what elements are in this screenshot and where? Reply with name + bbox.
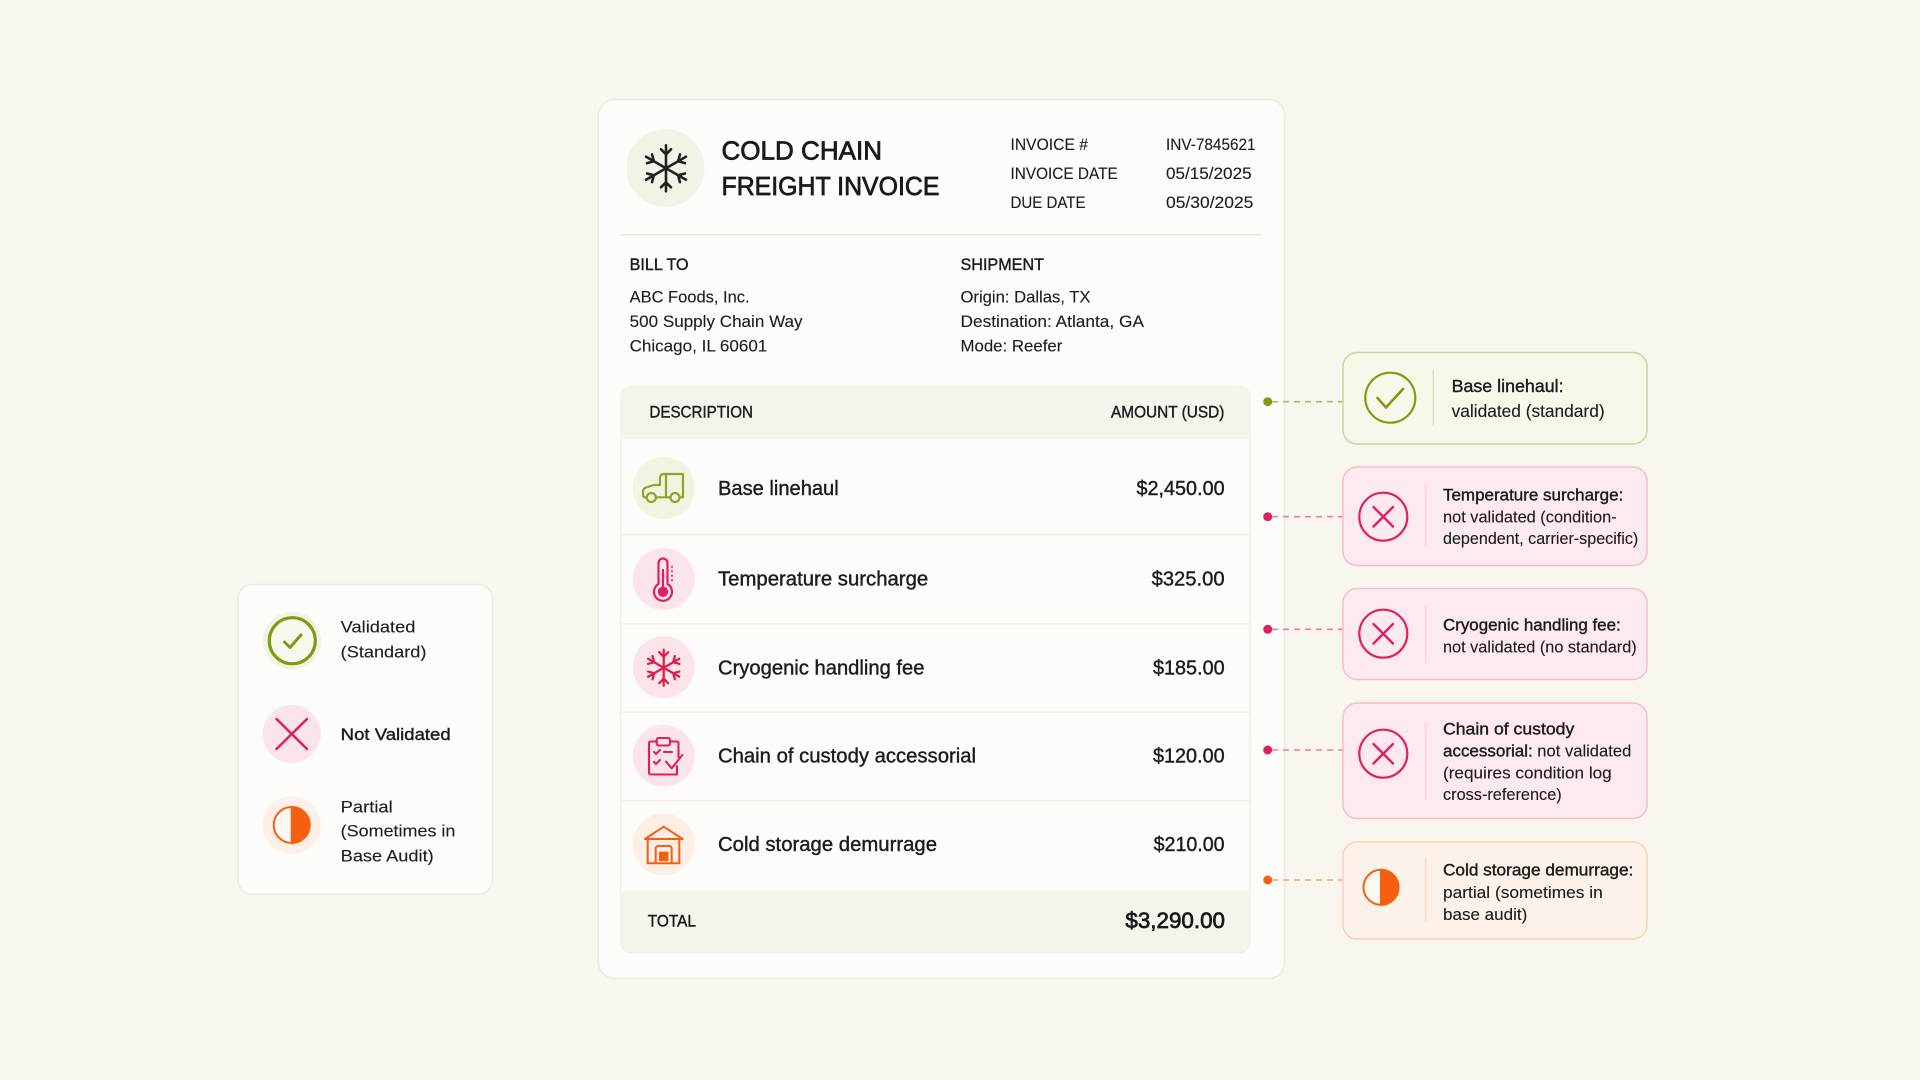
panel: invoice card <box>598 100 1284 978</box>
row: chain of custody accessorial: Chain of custody accessorial <box>718 746 976 768</box>
bill to block: 500 Supply Chain Way <box>630 312 803 331</box>
icon: clipboard checklist <box>633 725 695 787</box>
total row: $3,290.00 <box>1125 908 1225 933</box>
callout: base linehaul <box>1343 352 1647 444</box>
callout: temperature surcharge: dependent, carrier-specific) <box>1443 530 1638 548</box>
row: temperature surcharge: Temperature surcharge <box>718 569 928 591</box>
legend: partial <box>263 796 455 866</box>
shipment block: Destination: Atlanta, GA <box>960 312 1145 331</box>
callout: cryogenic handling fee <box>1343 588 1647 680</box>
invoice metadata: 05/30/2025 <box>1166 194 1253 212</box>
icon: warehouse <box>633 814 695 876</box>
callout: temperature surcharge: not validated (condition- <box>1443 508 1617 526</box>
row: chain of custody accessorial <box>633 725 1225 787</box>
row: temperature surcharge <box>633 548 1225 610</box>
legend: validated: Validated <box>341 618 415 636</box>
callout: cold storage demurrage: base audit) <box>1443 906 1527 924</box>
row: cryogenic handling fee: $185.00 <box>1153 657 1225 679</box>
connector: cryogenic handling fee <box>1263 625 1343 634</box>
row: base linehaul: Base linehaul <box>718 478 839 500</box>
connector: temperature surcharge <box>1263 512 1343 521</box>
table header: AMOUNT (USD) <box>1111 404 1224 422</box>
row: cryogenic handling fee: Cryogenic handling fee <box>718 657 924 679</box>
connector: cold storage demurrage <box>1263 876 1343 884</box>
invoice metadata: 05/15/2025 <box>1166 165 1252 183</box>
bill to block: ABC Foods, Inc. <box>630 288 750 306</box>
invoice metadata: INVOICE DATE <box>1010 165 1118 183</box>
icon: pink snowflake <box>633 636 695 698</box>
legend: not validated: Not Validated <box>341 725 451 744</box>
invoice metadata: DUE DATE <box>1010 194 1086 212</box>
callout: chain of custody accessorial: Chain of custody <box>1443 720 1575 738</box>
callout: chain of custody accessorial: not validated <box>1537 743 1631 761</box>
icon: thermometer <box>633 548 695 610</box>
legend: partial: Partial <box>341 798 393 816</box>
connector: chain of custody accessorial <box>1263 746 1343 754</box>
callout: cold storage demurrage <box>1343 842 1647 939</box>
shipment block: SHIPMENT <box>960 256 1044 274</box>
title: COLD CHAIN <box>722 138 882 166</box>
callout: temperature surcharge <box>1343 467 1647 566</box>
callout: cold storage demurrage: Cold storage demurrage: <box>1443 862 1633 880</box>
callout: temperature surcharge: Temperature surcharge: <box>1443 486 1623 504</box>
bill to block: BILL TO <box>630 256 689 274</box>
row: base linehaul: $2,450.00 <box>1136 478 1225 500</box>
callout: base linehaul: Base linehaul: <box>1452 376 1564 396</box>
icon: truck <box>633 457 695 519</box>
invoice metadata: INVOICE # <box>1010 136 1089 154</box>
legend: validated <box>263 612 426 670</box>
table header <box>620 386 1250 439</box>
row: cold storage demurrage <box>633 814 1225 876</box>
icon: snowflake badge <box>626 129 704 207</box>
callout: chain of custody accessorial: accessorial: <box>1443 743 1533 761</box>
invoice header <box>626 129 1256 212</box>
callout: cold storage demurrage: partial (sometimes in <box>1443 884 1603 902</box>
invoice metadata <box>1010 136 1256 212</box>
bill to block: Chicago, IL 60601 <box>630 336 767 356</box>
bill to block <box>630 256 803 356</box>
legend: not validated <box>263 705 451 763</box>
row: base linehaul <box>633 457 1225 519</box>
callout: chain of custody accessorial: cross-reference) <box>1443 786 1562 804</box>
legend: validated: (Standard) <box>341 642 426 662</box>
title <box>722 138 940 201</box>
legend: partial: Base Audit) <box>341 846 434 866</box>
legend: partial: (Sometimes in <box>341 822 455 840</box>
title: FREIGHT INVOICE <box>722 173 940 201</box>
callout: cryogenic handling fee: not validated (no standard) <box>1443 639 1637 657</box>
table <box>620 386 1250 952</box>
row: chain of custody accessorial: $120.00 <box>1153 746 1225 768</box>
table header: DESCRIPTION <box>649 404 753 422</box>
row: cold storage demurrage: Cold storage demurrage <box>718 834 937 856</box>
total row: TOTAL <box>648 913 696 931</box>
callout: chain of custody accessorial: (requires condition log <box>1443 764 1612 782</box>
shipment block <box>960 256 1145 356</box>
shipment block: Origin: Dallas, TX <box>960 288 1090 306</box>
callout: chain of custody accessorial <box>1343 703 1647 818</box>
shipment block: Mode: Reefer <box>960 336 1063 356</box>
row: cold storage demurrage: $210.00 <box>1154 834 1225 856</box>
invoice metadata: INV-7845621 <box>1166 136 1256 154</box>
row: cryogenic handling fee <box>633 636 1225 698</box>
legend panel <box>238 584 492 894</box>
callout: cryogenic handling fee: Cryogenic handling fee: <box>1443 617 1621 635</box>
row: temperature surcharge: $325.00 <box>1152 569 1225 591</box>
total row <box>620 890 1250 952</box>
callout: base linehaul: validated (standard) <box>1452 401 1605 421</box>
connector: base linehaul <box>1263 397 1343 406</box>
